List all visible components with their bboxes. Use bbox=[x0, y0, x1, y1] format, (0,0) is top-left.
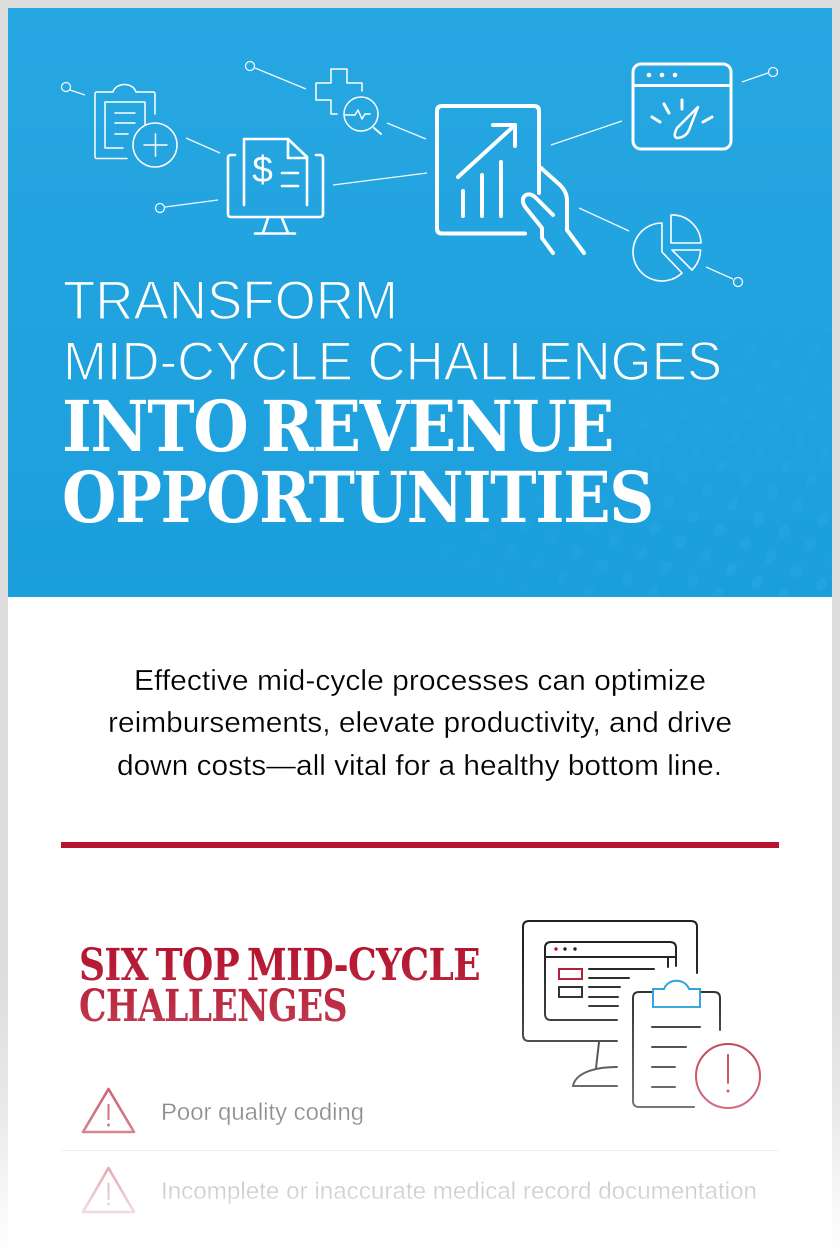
icon: clipboard with plus bbox=[95, 84, 177, 167]
icon: monitor with clipboard and alert bbox=[523, 921, 760, 1108]
connector lines and nodes bbox=[62, 62, 778, 286]
intro text: Effective mid-cycle processes can optimize bbox=[134, 665, 706, 697]
title: bold lines: INTO REVENUE bbox=[62, 385, 613, 468]
title: bold lines: OPPORTUNITIES bbox=[62, 456, 653, 539]
intro text: reimbursements, elevate productivity, and drive bbox=[108, 707, 732, 739]
title: light lines bbox=[63, 269, 722, 392]
icon: warning triangle bbox=[83, 1089, 134, 1132]
heading: six top mid-cycle challenges: SIX TOP MID-CYCLE bbox=[79, 940, 480, 991]
icon: pie chart bbox=[633, 215, 701, 281]
label: Poor quality coding bbox=[161, 1099, 364, 1126]
panel: blue header bbox=[8, 8, 832, 597]
row divider bbox=[61, 1150, 779, 1151]
title: light lines: TRANSFORM bbox=[63, 269, 398, 331]
icon: warning triangle bbox=[83, 1168, 134, 1212]
icon: tablet with rising chart held in hand bbox=[437, 106, 584, 253]
challenge row 2 bbox=[83, 1168, 757, 1212]
bottom white fade bbox=[0, 950, 840, 1260]
intro text: down costs—all vital for a healthy bottom line. bbox=[117, 750, 722, 782]
title: light lines: MID-CYCLE CHALLENGES bbox=[63, 330, 722, 392]
label: Incomplete or inaccurate medical record documentation bbox=[161, 1178, 757, 1205]
icon: browser window with gauge bbox=[633, 64, 731, 149]
title: bold lines bbox=[62, 385, 653, 539]
red divider bbox=[61, 842, 779, 848]
icon: medical cross with magnifier bbox=[316, 69, 381, 134]
icon: monitor with invoice bbox=[228, 139, 323, 234]
challenge row 1 bbox=[83, 1089, 364, 1132]
heading: six top mid-cycle challenges bbox=[79, 940, 480, 1032]
white content panel bbox=[8, 597, 832, 1260]
intro text bbox=[108, 665, 732, 782]
heading: six top mid-cycle challenges: CHALLENGES bbox=[79, 981, 347, 1032]
icon: monitor with invoice: $ bbox=[252, 149, 273, 190]
